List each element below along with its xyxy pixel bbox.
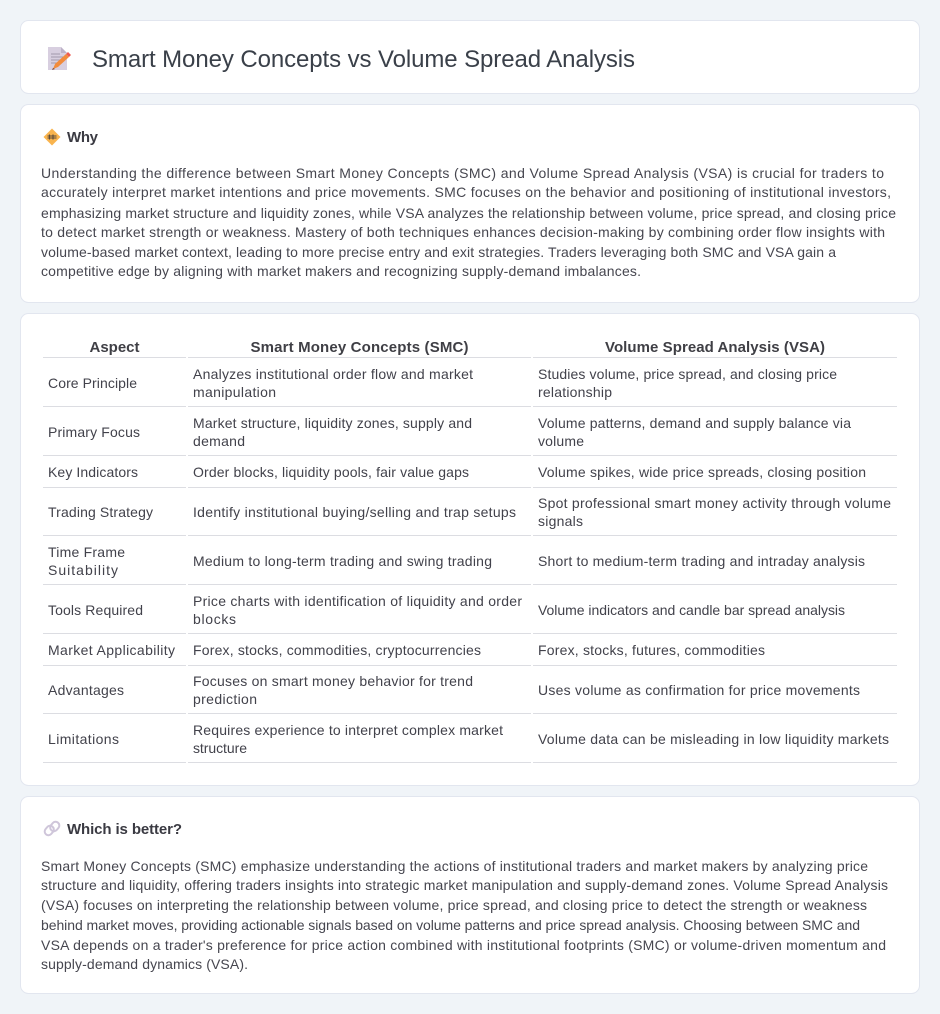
- icon: diamond sign: [44, 128, 60, 146]
- row: trading strategy: Identify institutional buying/selling and trap setups: [193, 504, 516, 520]
- panel: which is better: [20, 796, 920, 994]
- row: time frame suitability: Short to medium-term trading and intraday analysis: [538, 553, 865, 569]
- table header: Aspect: [90, 339, 140, 356]
- row: primary focus: Market structure, liquidity zones, supply and: [193, 415, 472, 431]
- row: core principle: manipulation: [193, 384, 276, 400]
- title: Smart Money Concepts vs Volume Spread Analysis: [92, 46, 635, 73]
- text block: which is better paragraph: VSA depends on a trader's preference for price action combined with institutional footprints (SMC) or volume-driven momentum and: [41, 937, 886, 953]
- text block: why paragraph: volume-based market context, leading to more precise entry and exit strategies. Traders leveraging both SMC and VSA gain a: [41, 244, 836, 260]
- row: primary focus: demand: [193, 433, 245, 449]
- text block: which is better paragraph: supply-demand dynamics (VSA).: [41, 956, 248, 972]
- row: core principle: [48, 366, 837, 400]
- icon: link: [43, 820, 61, 837]
- text block: which is better paragraph: [41, 858, 888, 972]
- row: tools required: Tools Required: [48, 602, 143, 618]
- row: tools required: Volume indicators and candle bar spread analysis: [538, 602, 845, 618]
- text block: which is better paragraph: structure and liquidity, offering traders insights into strategic market manipulation and supply-demand zones. Volume Spread Analysis: [41, 877, 888, 893]
- table header: Smart Money Concepts (SMC): [250, 339, 468, 356]
- row: primary focus: Volume patterns, demand and supply balance via: [538, 415, 851, 431]
- row: advantages: Advantages: [48, 682, 124, 698]
- row: tools required: blocks: [193, 611, 236, 627]
- row: tools required: Price charts with identification of liquidity and order: [193, 593, 522, 609]
- heading: why: Why: [67, 129, 99, 146]
- row: primary focus: Primary Focus: [48, 424, 140, 440]
- text block: why paragraph: Understanding the difference between Smart Money Concepts (SMC) and Volume Spread Analysis (VSA) is crucial for traders to: [41, 165, 884, 181]
- row: core principle: Studies volume, price spread, and closing price: [538, 366, 837, 382]
- row: limitations: Limitations: [48, 731, 119, 747]
- row: advantages: Focuses on smart money behavior for trend: [193, 673, 473, 689]
- panel: comparison table: [20, 314, 920, 786]
- text block: which is better paragraph: behind market moves, providing actionable signals based on volume patterns and price spread analysis. Choosing between SMC and: [41, 917, 860, 933]
- row: time frame suitability: Medium to long-term trading and swing trading: [193, 553, 492, 569]
- row: primary focus: [48, 415, 851, 449]
- text block: which is better paragraph: Smart Money Concepts (SMC) emphasize understanding the actions of institutional traders and market makers by analyzing price: [41, 858, 868, 874]
- row: trading strategy: [48, 495, 891, 529]
- row: key indicators: [48, 464, 866, 480]
- row: market applicability: Forex, stocks, futures, commodities: [538, 642, 765, 658]
- row: core principle: Core Principle: [48, 375, 137, 391]
- table header: Volume Spread Analysis (VSA): [605, 339, 825, 356]
- text block: why paragraph: to detect market strength or weakness. Mastery of both techniques enhances decision-making by combining order flow insights with: [41, 224, 885, 240]
- row: tools required: [48, 593, 845, 627]
- row: advantages: prediction: [193, 691, 257, 707]
- row: key indicators: Order blocks, liquidity pools, fair value gaps: [193, 464, 469, 480]
- text block: why paragraph: [41, 165, 896, 279]
- row: time frame suitability: Suitability: [48, 562, 118, 578]
- text block: which is better paragraph: (VSA) focuses on interpreting the relationship between volume, price spread, and closing price to detect the strength or weakness: [41, 897, 867, 913]
- panel: title card: [20, 20, 920, 94]
- row: key indicators: Key Indicators: [48, 464, 138, 480]
- row: limitations: Requires experience to interpret complex market: [193, 722, 503, 738]
- row: primary focus: volume: [538, 433, 584, 449]
- text block: why paragraph: competitive edge by aligning with market makers and recognizing supply-demand imbalances.: [41, 263, 641, 279]
- table header: [90, 339, 825, 356]
- row: trading strategy: Spot professional smart money activity through volume: [538, 495, 891, 511]
- row: market applicability: Market Applicability: [48, 642, 175, 658]
- icon: document with pencil: [48, 47, 71, 70]
- panel: why: [20, 104, 920, 302]
- table grid lines: [43, 357, 897, 763]
- row: time frame suitability: Time Frame: [48, 544, 125, 560]
- row: advantages: Uses volume as confirmation for price movements: [538, 682, 860, 698]
- row: time frame suitability: [48, 544, 865, 578]
- text block: why paragraph: emphasizing market structure and liquidity zones, while VSA analyzes the relationship between volume, price spread, and closing price: [41, 205, 896, 221]
- row: core principle: relationship: [538, 384, 612, 400]
- row: market applicability: [48, 642, 765, 658]
- row: trading strategy: signals: [538, 513, 583, 529]
- row: trading strategy: Trading Strategy: [48, 504, 153, 520]
- row: key indicators: Volume spikes, wide price spreads, closing position: [538, 464, 866, 480]
- row: core principle: Analyzes institutional order flow and market: [193, 366, 473, 382]
- row: limitations: [48, 722, 889, 756]
- text block: why paragraph: accurately interpret market intentions and price movements. SMC focuses on the behavior and positioning of institutional investors,: [41, 184, 891, 200]
- row: limitations: Volume data can be misleading in low liquidity markets: [538, 731, 889, 747]
- heading: which is better: Which is better?: [67, 821, 182, 838]
- row: limitations: structure: [193, 740, 247, 756]
- row: advantages: [48, 673, 860, 707]
- row: market applicability: Forex, stocks, commodities, cryptocurrencies: [193, 642, 481, 658]
